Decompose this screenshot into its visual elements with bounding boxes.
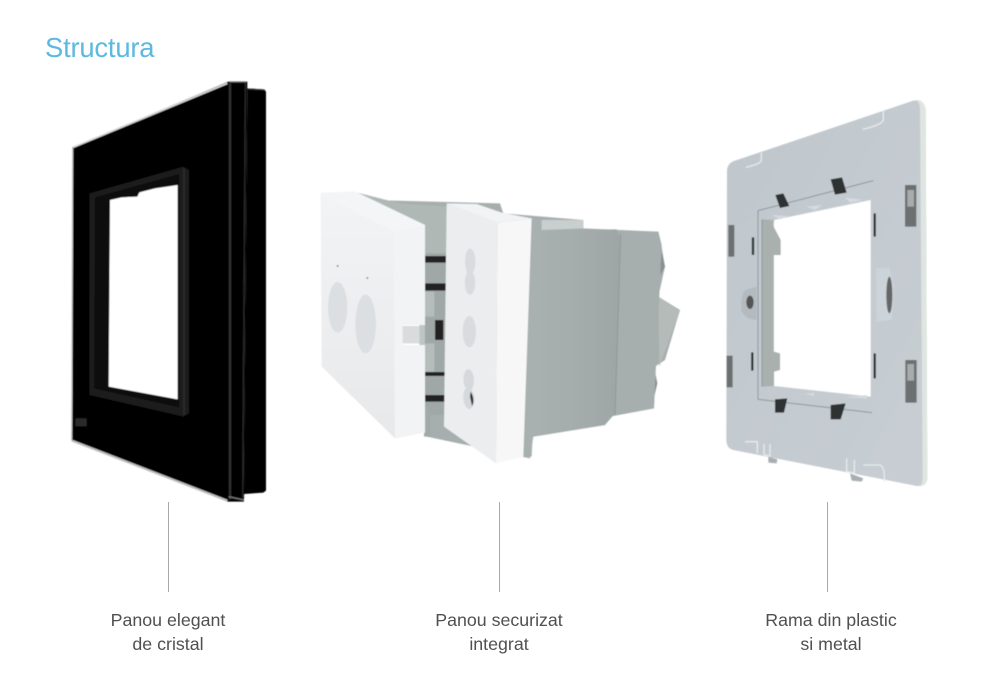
vertical notches bbox=[752, 213, 875, 378]
label: frame: Rama din plastic bbox=[765, 610, 897, 630]
label: frame: si metal bbox=[800, 634, 862, 654]
frame plate bbox=[726, 100, 927, 486]
label: secured panel: integrat bbox=[469, 634, 529, 654]
right module face bbox=[447, 203, 532, 223]
connector line: crystal panel bbox=[168, 502, 169, 592]
corner tabs bbox=[745, 111, 884, 482]
left module face bbox=[321, 191, 425, 232]
screw tab left bbox=[741, 287, 757, 320]
label: secured panel: Panou securizat bbox=[435, 610, 563, 630]
panel: plastic and metal mounting frame bbox=[726, 100, 927, 486]
title: Structura bbox=[45, 32, 154, 63]
outer rim highlight bbox=[917, 100, 927, 486]
side slots bbox=[905, 185, 916, 227]
label: crystal panel bbox=[111, 610, 226, 654]
window opening bbox=[109, 185, 178, 399]
connector line: secured panel bbox=[499, 502, 500, 592]
panel: black crystal frame bbox=[72, 82, 266, 502]
touch buttons bbox=[328, 282, 347, 333]
label: frame bbox=[765, 610, 897, 654]
label: crystal panel: de cristal bbox=[132, 634, 204, 654]
window ledges bbox=[772, 197, 867, 398]
front glass bbox=[72, 82, 247, 502]
label: crystal panel: Panou elegant bbox=[111, 610, 225, 630]
switch rocker bbox=[658, 297, 680, 367]
panel: white socket module bbox=[321, 191, 680, 463]
screw tab right bbox=[876, 267, 894, 322]
side terminals bbox=[652, 248, 665, 407]
clips bbox=[775, 177, 847, 419]
label: secured panel bbox=[435, 610, 563, 654]
inner left wall bbox=[762, 219, 781, 387]
main grey cover bbox=[533, 229, 621, 437]
connector line: frame bbox=[827, 502, 828, 592]
glass edge highlights bbox=[73, 83, 227, 147]
rear grey body bbox=[353, 192, 680, 458]
logo mark bbox=[75, 418, 87, 426]
inner bezel bbox=[89, 167, 189, 417]
back plate bbox=[244, 88, 266, 494]
socket holes bbox=[465, 248, 475, 295]
middle stacked terminals bbox=[425, 253, 447, 415]
